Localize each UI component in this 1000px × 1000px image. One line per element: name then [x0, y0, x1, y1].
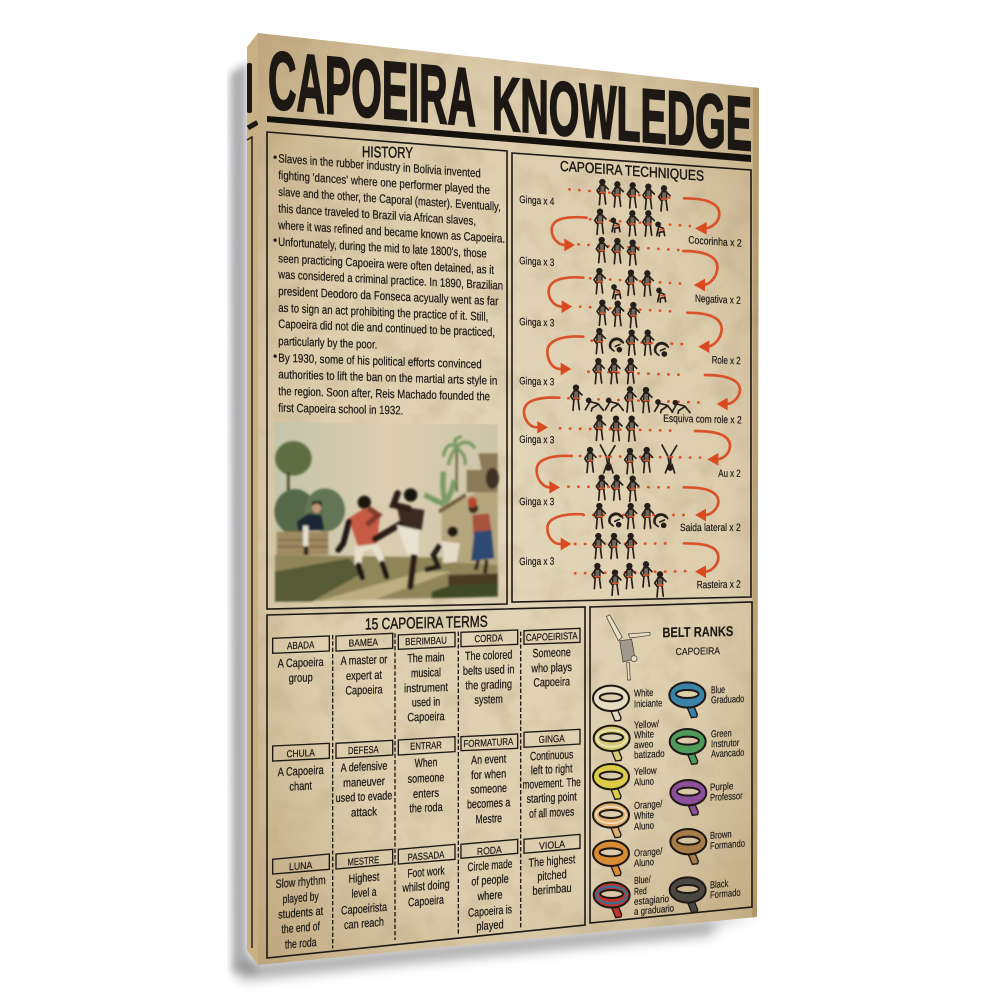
history text: slave and the other, the Caporal (master). Eventually, — [278, 185, 501, 214]
term definitions: chant — [289, 778, 313, 794]
term names: ENTRAR — [410, 740, 442, 753]
icon: handstand figure — [606, 615, 650, 680]
belt labels: Orange/ — [634, 846, 663, 860]
term names: PASSADA — [408, 850, 445, 864]
terms grid — [273, 628, 581, 952]
term definitions: instrument — [404, 680, 449, 695]
belt labels: a graduario — [634, 903, 674, 918]
term names: RODA — [477, 845, 502, 858]
belt labels: Yellow/ — [634, 719, 659, 731]
terms heading: 15 CAPOEIRA TERMS — [365, 614, 488, 633]
belt labels: aweo — [634, 739, 654, 751]
belt contents — [593, 615, 745, 918]
term definitions: used to evade — [336, 788, 393, 805]
panel: history — [267, 132, 507, 609]
term definitions: Capoeirista — [341, 900, 387, 918]
term definitions: the grading — [465, 677, 512, 692]
belt labels: Formando — [710, 839, 745, 852]
term definitions: of all moves — [529, 805, 574, 821]
history text: • — [273, 233, 277, 247]
history text: Unfortunately, during the mid to late 1800's, those — [278, 235, 487, 261]
term definitions: berimbau — [532, 881, 572, 898]
term names — [286, 631, 578, 873]
move labels: Au x 2 — [718, 468, 741, 480]
history text: this dance traveled to Brazil via African slaves, — [278, 201, 476, 228]
history text: the region. Soon after, Reis Machado founded the — [278, 384, 490, 403]
techniques heading: CAPOEIRA TECHNIQUES — [560, 159, 704, 185]
move labels: Rasteira x 2 — [697, 579, 741, 591]
term definitions: left to right — [531, 761, 573, 777]
panel: 15 capoeira terms — [267, 607, 585, 958]
history text: fighting 'dances' where one performer played the — [278, 168, 490, 197]
term definitions: Capoeira — [345, 682, 383, 698]
term definitions: system — [474, 692, 503, 707]
term names: MESTRE — [347, 855, 379, 869]
history text: Slaves in the rubber industry in Bolivia invented — [278, 151, 481, 180]
term definitions: Capoeira — [408, 892, 444, 910]
belt labels: Graduado — [711, 694, 745, 706]
ginga labels: Ginga x 3 — [519, 556, 554, 568]
history text: Capoeira did not die and continued to be practiced, — [278, 317, 495, 339]
term definitions: starting point — [527, 789, 577, 806]
move labels: Role x 2 — [712, 354, 741, 367]
term definitions: A defensive — [341, 758, 388, 775]
term definitions: pitched — [537, 867, 567, 884]
belt labels: Professor — [710, 791, 743, 804]
belt labels: Black — [710, 879, 729, 891]
belt labels: Iniciante — [634, 698, 663, 710]
belt labels: Orange/ — [634, 799, 663, 812]
term definitions: used in — [412, 695, 440, 709]
term definitions: Slow rhythm — [276, 873, 326, 891]
belt labels: Green — [711, 728, 732, 740]
term definitions: The highest — [529, 852, 576, 870]
belt labels: Instrutor — [711, 738, 740, 750]
belt frame — [590, 602, 752, 923]
history heading: HISTORY — [362, 144, 413, 162]
move labels: Esquiva com role x 2 — [663, 413, 742, 426]
history text: as to sign an act prohibiting the practice of it. Still, — [278, 301, 488, 324]
belt labels: Blue — [711, 685, 725, 696]
term definitions: Capoeira is — [468, 902, 512, 920]
term names: LUNA — [289, 860, 313, 873]
capoeira subheading: CAPOEIRA — [676, 646, 720, 658]
history text — [273, 150, 505, 417]
belt labels: Formado — [710, 888, 741, 901]
term definitions: The main — [407, 650, 445, 665]
painting of capoeira — [274, 422, 499, 602]
history text: By 1930, some of his political efforts convinced — [278, 351, 482, 371]
belt labels: Aluno — [634, 857, 654, 870]
belt labels: Brown — [710, 829, 732, 842]
history frame — [267, 132, 507, 609]
belt labels: batizado — [634, 749, 665, 761]
history text: first Capoeira school in 1932. — [278, 401, 403, 417]
term definitions: group — [289, 670, 313, 685]
ginga labels: Ginga x 3 — [519, 316, 554, 330]
term definitions: level a — [351, 885, 377, 901]
belt labels: Red — [634, 886, 647, 898]
ginga labels: Ginga x 4 — [519, 194, 554, 208]
term definitions: the roda — [285, 935, 317, 952]
term definitions: movement. The — [522, 775, 581, 792]
term definitions: The colored — [465, 648, 512, 663]
term definitions: Someone — [532, 645, 571, 660]
term names: CORDA — [474, 633, 503, 645]
canvas spine — [247, 33, 259, 965]
term names: DEFESA — [348, 745, 379, 757]
term names: CHULA — [286, 748, 315, 760]
term definitions — [276, 645, 581, 952]
term definitions: where — [477, 887, 503, 903]
term names: VIOLA — [539, 839, 565, 852]
term definitions: of people — [471, 871, 509, 889]
panel: belt ranks — [590, 602, 752, 923]
ginga labels: Ginga x 3 — [519, 496, 554, 508]
term definitions: for when — [471, 766, 506, 782]
belt labels: White — [634, 688, 654, 700]
history text: seen practicing Capoeira were often detained, as it — [278, 251, 495, 277]
term definitions: attack — [351, 804, 378, 820]
belt labels: White — [634, 729, 654, 741]
term definitions: When — [415, 755, 437, 770]
term names: GINGA — [539, 734, 565, 746]
term definitions: belts used in — [463, 662, 514, 678]
panel: capoeira techniques — [512, 153, 751, 602]
terms frame — [267, 607, 585, 958]
term definitions: becomes a — [467, 795, 511, 811]
term definitions: Foot work — [407, 863, 445, 881]
ginga labels — [519, 194, 554, 568]
movement diagram upper — [547, 180, 740, 390]
term names: BERIMBAU — [405, 636, 447, 648]
history text: particularly by the poor. — [278, 334, 377, 352]
move labels: Cocorinha x 2 — [688, 234, 742, 250]
term names: ABADA — [287, 640, 315, 652]
history text: president Deodoro da Fonseca acyually went as far — [278, 284, 498, 308]
move labels — [663, 234, 742, 591]
history text: was considered a criminal practice. In 1890, Brazilian — [278, 267, 503, 293]
term definitions: expert at — [346, 668, 383, 683]
term definitions: whilst doing — [402, 877, 450, 895]
belt labels: Blue/ — [634, 875, 651, 887]
term definitions: Capoeira — [407, 709, 445, 724]
belt labels — [634, 685, 745, 918]
term definitions: can reach — [344, 915, 384, 932]
term definitions: enters — [413, 786, 439, 801]
techniques frame — [512, 153, 751, 602]
belt labels: Aluno — [634, 821, 654, 833]
move labels: Saida lateral x 2 — [680, 522, 741, 534]
history text: • — [273, 150, 277, 164]
term definitions: the roda — [409, 800, 443, 815]
term definitions: maneuver — [343, 774, 385, 790]
term definitions: Mestre — [475, 811, 502, 826]
belt labels: Aluno — [634, 776, 654, 789]
belt labels: estagiario — [634, 894, 669, 908]
term definitions: who plays — [531, 660, 572, 675]
term definitions: someone — [470, 781, 507, 797]
term definitions: the end of — [281, 919, 320, 936]
term definitions: Capoeira — [533, 674, 570, 690]
title: KNOWLEDGE — [492, 61, 752, 168]
ginga labels: Ginga x 3 — [519, 434, 554, 446]
term definitions: An event — [471, 751, 507, 767]
title: CAPOEIRA — [268, 35, 476, 144]
term definitions: Continuous — [530, 747, 573, 763]
ginga labels: Ginga x 3 — [519, 255, 554, 269]
ginga labels: Ginga x 3 — [519, 375, 554, 388]
term definitions: played — [476, 917, 504, 933]
belt labels: Purple — [710, 781, 734, 794]
term definitions: musical — [411, 665, 441, 680]
move labels: Negativa x 2 — [695, 293, 741, 307]
term names: FORMATURA — [463, 737, 514, 750]
term names: BAMEA — [349, 637, 378, 650]
canvas drop shadow — [230, 62, 758, 980]
title underline — [267, 116, 751, 162]
term names: CAPOEIRISTA — [526, 631, 578, 644]
history text: • — [273, 349, 277, 363]
term definitions: A Capoeira — [278, 763, 324, 779]
term definitions: someone — [408, 770, 445, 786]
term definitions: played by — [283, 889, 319, 906]
belt labels: White — [634, 810, 654, 822]
canvas front parchment — [258, 33, 759, 965]
history text: where it was refined and became known as Capoeira. — [278, 218, 505, 246]
belts — [593, 682, 706, 918]
history text: authorities to lift the ban on the martial arts style in — [278, 367, 497, 388]
term definitions: A Capoeira — [278, 655, 324, 670]
movement diagram lower — [524, 385, 740, 597]
term definitions: A master or — [341, 652, 387, 668]
term definitions: Highest — [349, 869, 380, 886]
belt labels: Avancado — [711, 748, 745, 760]
term definitions: Circle made — [467, 856, 513, 874]
belt labels: Yellow — [634, 766, 657, 778]
term definitions: students at — [278, 904, 324, 922]
belt ranks heading: BELT RANKS — [662, 623, 733, 640]
